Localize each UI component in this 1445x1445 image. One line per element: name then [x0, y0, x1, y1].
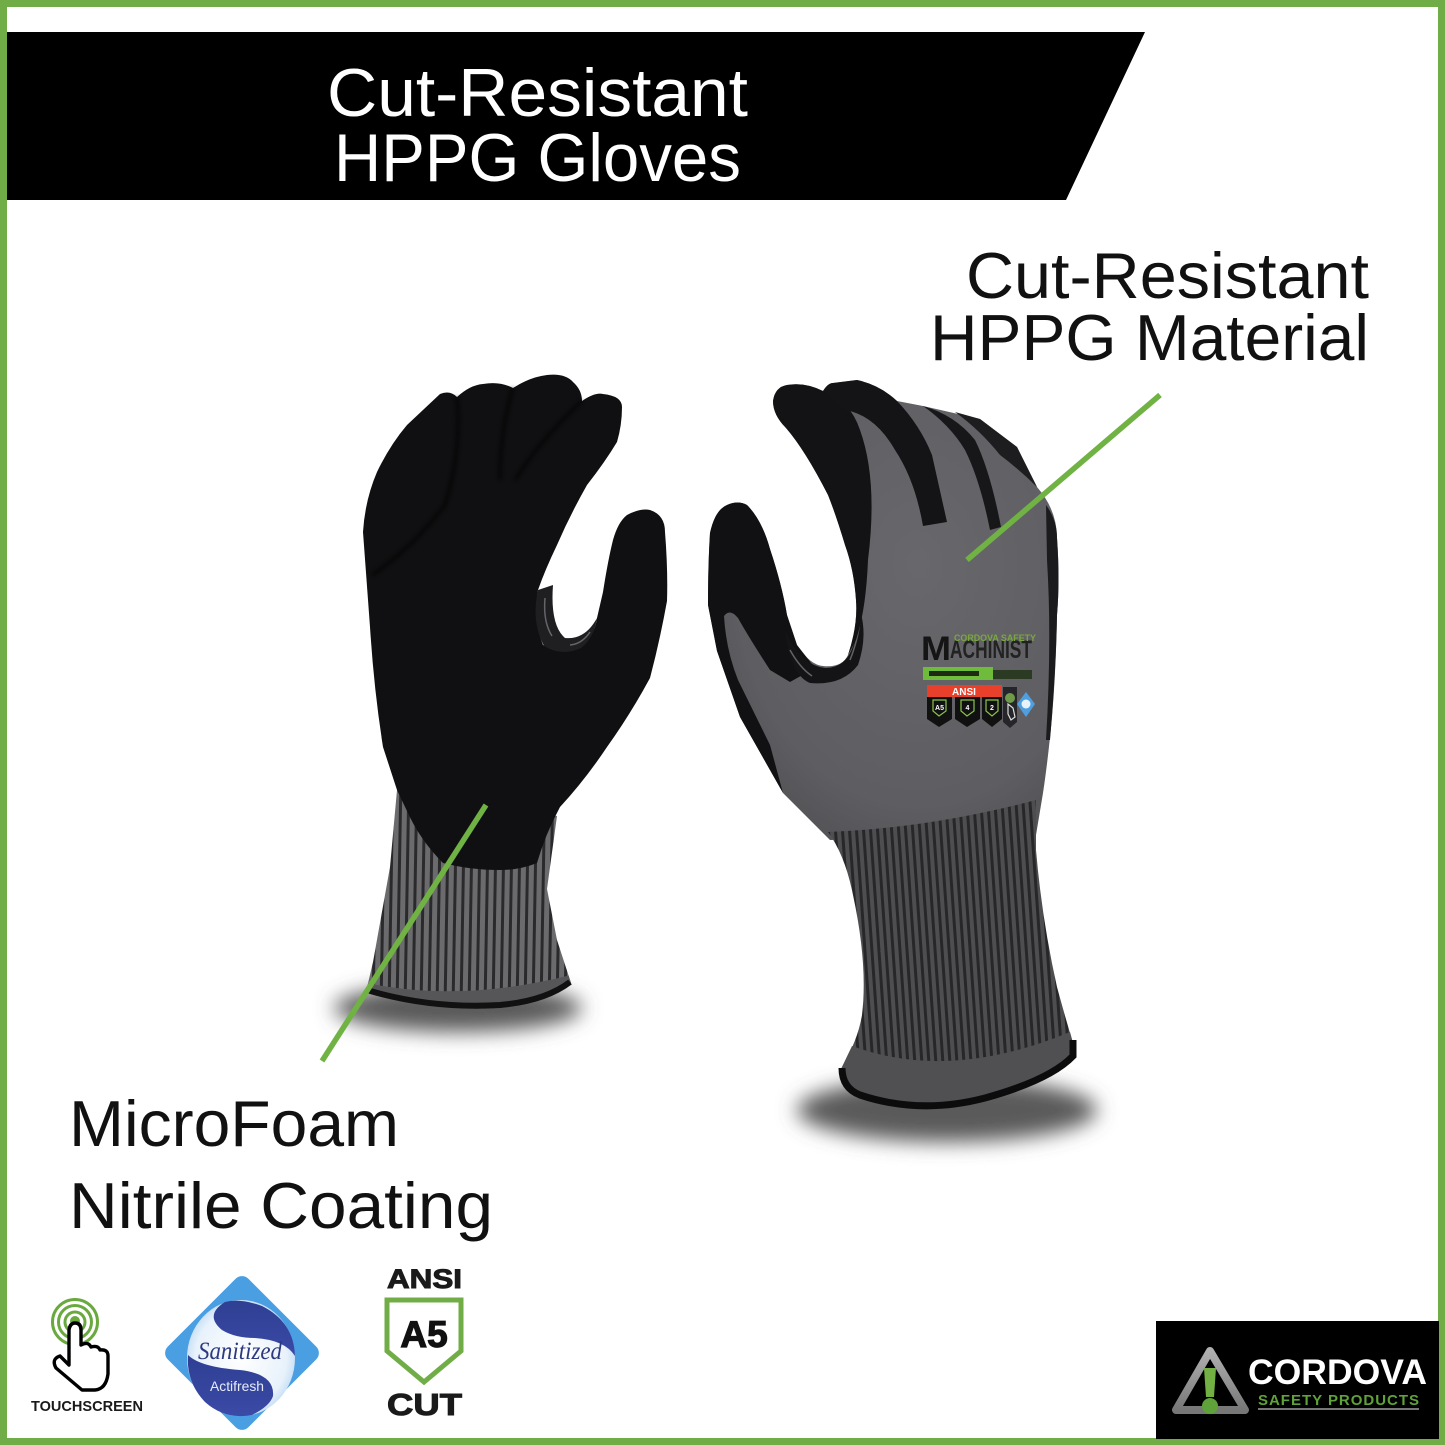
- floor shadow: [334, 984, 582, 1032]
- ring finger coating: [923, 406, 1001, 530]
- Machinist product logo: ANSI: [952, 687, 976, 698]
- callout line: HPPG material: [967, 395, 1160, 560]
- pointing hand: [54, 1323, 108, 1390]
- title: Cut-Resistant: [327, 55, 748, 131]
- navy swoosh bottom: [188, 1355, 273, 1416]
- icon: touchscreen: [31, 1300, 143, 1415]
- logo wordmark: M: [921, 630, 951, 668]
- inner circle: [187, 1300, 295, 1416]
- blue diamond: [161, 1272, 323, 1434]
- Machinist product logo: ACHINIST: [950, 636, 1032, 664]
- green shield: [387, 1300, 461, 1382]
- right glove: back view: [708, 380, 1097, 1142]
- puncture badge: 2: [990, 705, 994, 712]
- knit glove body: [708, 380, 1058, 840]
- label: MicroFoam nitrile coating: MicroFoam: [69, 1087, 399, 1160]
- green tagline bar: [923, 667, 993, 680]
- black nitrile coating: [363, 375, 667, 870]
- index finger coating: [773, 384, 872, 655]
- brand line: CORDOVA SAFETY: [954, 633, 1036, 643]
- icon: ANSI A5 cut badge: [387, 1264, 462, 1422]
- touchscreen label: TOUCHSCREEN: [31, 1398, 143, 1415]
- Sanitized wordmark: Sanitized: [198, 1338, 282, 1365]
- floor shadow: [797, 1078, 1097, 1142]
- exclamation mark: [1204, 1368, 1216, 1397]
- Machinist product logo: [921, 630, 1036, 728]
- outer edge coating: [1046, 505, 1058, 740]
- title: HPPG Gloves: [334, 120, 741, 196]
- CORDOVA wordmark: CORDOVA: [1248, 1353, 1427, 1392]
- web highlights: [545, 598, 590, 645]
- logo: Cordova Safety Products: [1156, 1321, 1439, 1439]
- finger creases: [372, 388, 582, 575]
- ribbed cuff: [368, 790, 571, 1008]
- cuff hem: [367, 982, 570, 1006]
- cuff lower knit band: [841, 1032, 1073, 1106]
- middle finger coating: [823, 380, 947, 526]
- underline: [1258, 1408, 1419, 1410]
- glossy thumb web: [785, 600, 864, 683]
- left glove: palm view: [334, 375, 667, 1032]
- banner shape: [7, 32, 1145, 200]
- abrasion badge: 4: [966, 705, 970, 712]
- sanitized tag: [1017, 692, 1035, 717]
- navy swoosh top: [214, 1301, 295, 1356]
- label: cut-resistant HPPG material: HPPG Material: [930, 301, 1369, 374]
- logo background: [1156, 1321, 1439, 1439]
- warning triangle: [1176, 1351, 1245, 1410]
- Actifresh label: Actifresh: [210, 1378, 264, 1394]
- touch tag: [1003, 687, 1017, 728]
- little finger coating: [955, 412, 1037, 487]
- touch rings: [52, 1300, 98, 1344]
- cuff hem: [842, 1040, 1073, 1106]
- ANSI text: ANSI: [387, 1264, 462, 1294]
- label: MicroFoam nitrile coating: Nitrile Coating: [69, 1169, 493, 1242]
- glossy thumb web: [536, 585, 597, 652]
- web highlights: [790, 620, 860, 676]
- thumb coating: [708, 502, 815, 793]
- callout line: nitrile coating: [322, 805, 486, 1061]
- CUT text: CUT: [387, 1387, 462, 1422]
- label: cut-resistant HPPG material: Cut-Resistant: [966, 239, 1369, 312]
- A5 text: A5: [400, 1314, 448, 1355]
- A5 badge: A5: [935, 705, 944, 712]
- icon: Sanitized Actifresh: [161, 1272, 323, 1434]
- ribbed cuff: [828, 800, 1073, 1106]
- safety products: SAFETY PRODUCTS: [1258, 1392, 1419, 1409]
- ANSI red bar: [927, 685, 1002, 697]
- title banner: [7, 32, 1145, 200]
